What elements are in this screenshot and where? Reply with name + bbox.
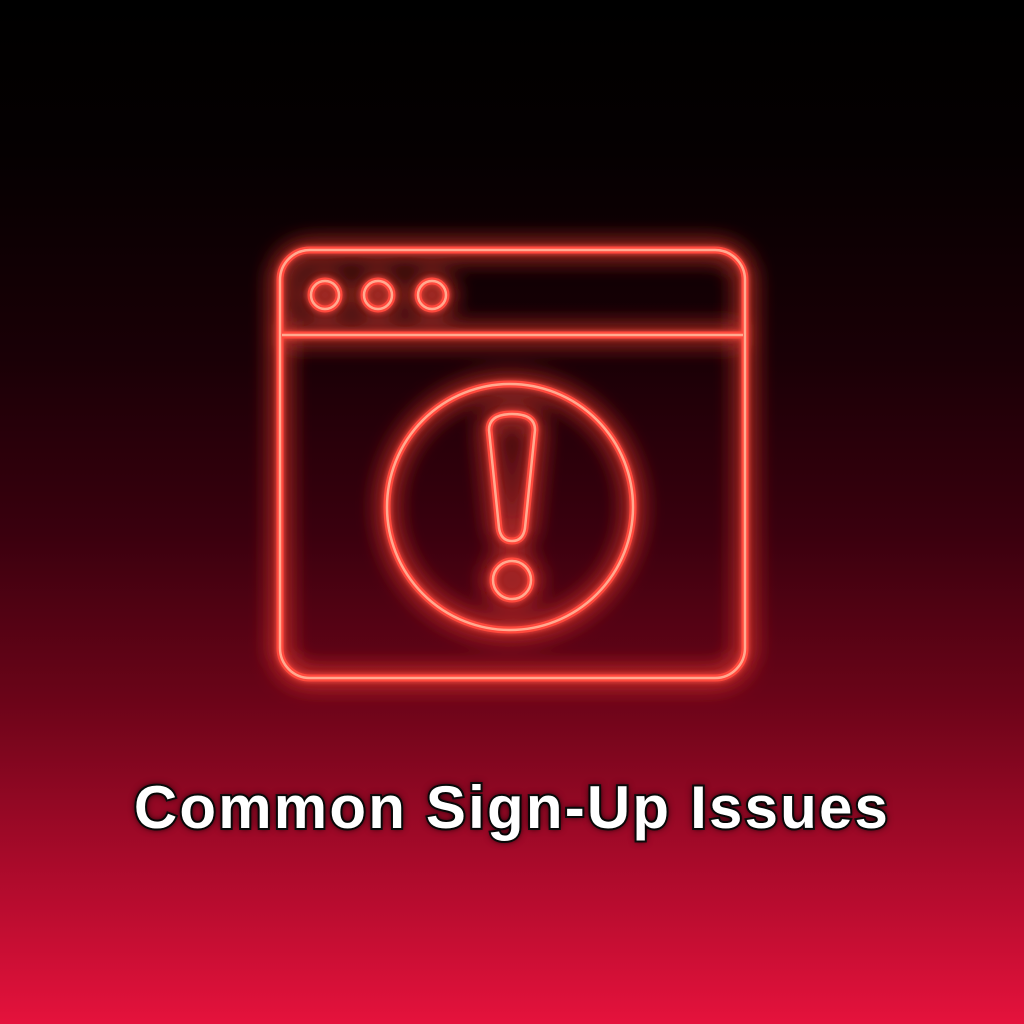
exclamation mark [489, 414, 535, 599]
window frame [280, 250, 745, 678]
title: Common Sign-Up Issues [134, 774, 890, 841]
window dots [311, 281, 446, 309]
warning circle [387, 384, 633, 630]
